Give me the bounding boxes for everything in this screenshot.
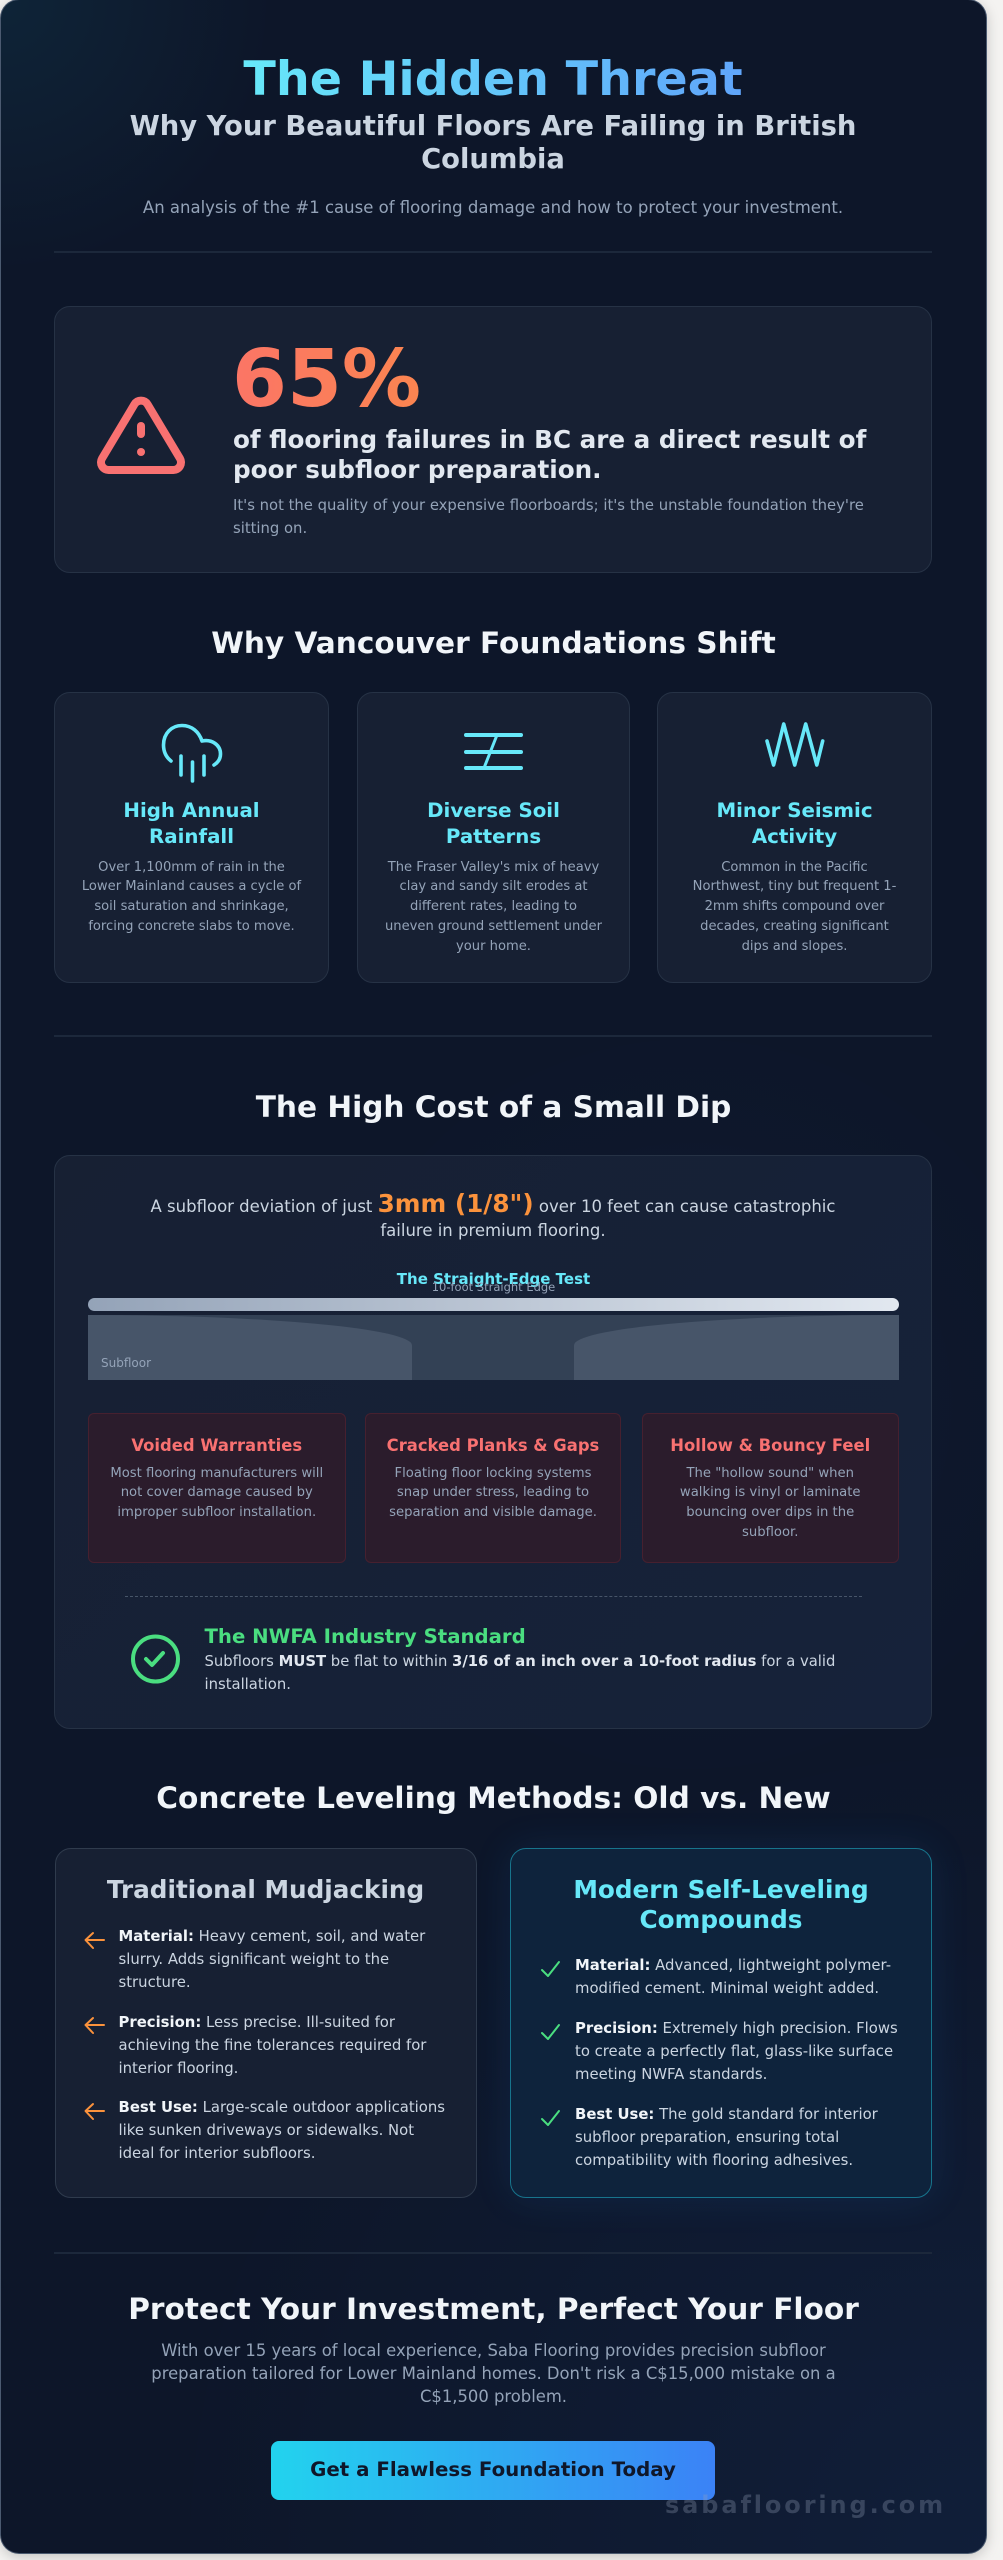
call to action heading: Protect Your Investment, Perfect Your Floor	[128, 2292, 859, 2326]
straight edge bar	[88, 1298, 899, 1311]
card description: Common in the Pacific	[721, 860, 868, 874]
intro text: A subfloor deviation of just 3mm (1/8") over 10 feet can cause catastrophic	[151, 1189, 835, 1218]
card description	[693, 860, 896, 954]
card title	[427, 798, 560, 848]
card description: forcing concrete slabs to move.	[88, 919, 295, 934]
item text: Best Use: Large-scale outdoor applications	[118, 2098, 445, 2116]
item text: structure.	[118, 1973, 191, 1991]
risk text: subfloor.	[742, 1525, 798, 1540]
icon: check	[539, 2102, 563, 2126]
title: The Hidden Threat	[243, 52, 743, 106]
heading: high cost: The High Cost of a Small Dip	[256, 1090, 731, 1124]
call to action text: C$1,500 problem.	[420, 2387, 567, 2406]
icon: arrow	[84, 2103, 105, 2120]
card title: Patterns	[446, 825, 541, 848]
card description	[82, 860, 302, 934]
panel: soil	[357, 692, 630, 983]
card title	[716, 798, 873, 848]
standard text	[204, 1652, 835, 1692]
statistic headline: poor subfloor preparation.	[233, 454, 602, 484]
statistic number: 65%	[232, 332, 421, 424]
call to action button: Get a Flawless Foundation Today	[310, 2458, 676, 2481]
risk: voided warranties	[88, 1412, 346, 1562]
risk text: walking is vinyl or laminate	[680, 1485, 861, 1500]
card title: Activity	[752, 825, 837, 848]
heading: leveling methods: Concrete Leveling Methods: Old vs. New	[156, 1781, 831, 1815]
card description: decades, creating significant	[700, 919, 889, 934]
card title: High Annual	[123, 798, 260, 822]
icon: arrow	[84, 2017, 105, 2034]
panel: modern self-leveling	[510, 1848, 932, 2198]
item text	[575, 2102, 878, 2172]
item text	[575, 1956, 891, 1997]
item text: subfloor preparation, ensuring total	[575, 2128, 839, 2146]
risk text: improper subfloor installation.	[117, 1505, 316, 1520]
item text: Material: Advanced, lightweight polymer-	[575, 1956, 891, 1974]
subtitle	[130, 110, 856, 174]
card description: different rates, leading to	[410, 899, 577, 914]
risk title: Voided Warranties	[131, 1436, 302, 1454]
intro text	[150, 1189, 835, 1240]
statistic description: sitting on.	[233, 520, 307, 537]
diagram: straight-edge test	[88, 1270, 899, 1380]
panel title: Compounds	[640, 1904, 802, 1934]
panel: seismic	[657, 692, 932, 983]
standard title: The NWFA Industry Standard	[204, 1625, 526, 1648]
item text	[118, 1927, 426, 1991]
statistic description	[233, 496, 864, 537]
panel: traditional mudjacking	[54, 1848, 476, 2198]
risk text: Most flooring manufacturers will	[110, 1466, 323, 1480]
item text: achieving the fine tolerances required for	[118, 2036, 426, 2054]
diagram title: The Straight-Edge Test	[397, 1270, 590, 1288]
risk text: separation and visible damage.	[389, 1505, 597, 1520]
risk text	[389, 1466, 597, 1520]
panel title: Modern Self-Leveling	[573, 1874, 869, 1904]
item: precision	[84, 2012, 426, 2077]
panel: 65% statistic	[54, 306, 932, 573]
risk text	[110, 1466, 323, 1520]
card title: Minor Seismic	[716, 798, 873, 822]
item text: compatibility with flooring adhesives.	[575, 2151, 853, 2169]
item text: meeting NWFA standards.	[575, 2065, 767, 2083]
card description: uneven ground settlement under	[385, 919, 602, 934]
item: precision	[541, 2018, 898, 2083]
item text: Material: Heavy cement, soil, and water	[118, 1927, 425, 1945]
risk: cracked planks	[365, 1412, 621, 1562]
standard text: installation.	[204, 1676, 291, 1692]
subtitle: Columbia	[421, 144, 565, 174]
tagline: An analysis of the #1 cause of flooring damage and how to protect your investment.	[143, 198, 843, 217]
call to action text	[1, 2339, 986, 2409]
panel: rainfall	[54, 692, 329, 983]
call to action button	[271, 2441, 715, 2500]
item: best use	[539, 2102, 919, 2172]
item text: Precision: Extremely high precision. Flows	[575, 2018, 898, 2036]
panel title: Traditional Mudjacking	[107, 1874, 424, 1904]
card title: Rainfall	[149, 825, 234, 848]
panel title	[573, 1874, 869, 1934]
heading: why foundations shift: Why Vancouver Foundations Shift	[211, 626, 776, 660]
subfloor label: Subfloor	[101, 1356, 151, 1370]
risk text: The "hollow sound" when	[686, 1466, 854, 1480]
statistic headline	[233, 424, 867, 484]
item text: ideal for interior subfloors.	[118, 2144, 316, 2162]
icon: rain cloud	[162, 724, 222, 783]
item text: interior flooring.	[118, 2059, 238, 2077]
item text: Precision: Less precise. Ill-suited for	[118, 2012, 395, 2030]
risk text: not cover damage caused by	[121, 1485, 313, 1500]
statistic description: It's not the quality of your expensive floorboards; it's the unstable foundation they're	[233, 496, 864, 514]
left subfloor hump	[88, 1314, 412, 1380]
risk text: Floating floor locking systems	[395, 1466, 591, 1480]
intro text: failure in premium flooring.	[380, 1220, 606, 1240]
item: material	[541, 1956, 891, 1997]
risk title: Cracked Planks & Gaps	[387, 1436, 599, 1454]
risk text: snap under stress, leading to	[397, 1485, 589, 1500]
watermark: sabaflooring.com	[665, 2491, 946, 2519]
statistic headline: of flooring failures in BC are a direct result of	[233, 424, 866, 454]
item text	[118, 2012, 426, 2077]
right subfloor hump	[574, 1314, 899, 1380]
card title: Diverse Soil	[427, 798, 560, 822]
panel: cost of a dip	[54, 1155, 932, 1729]
card description: Lower Mainland causes a cycle of	[82, 879, 301, 894]
card description: dips and slopes.	[742, 939, 847, 954]
icon: soil layers	[464, 733, 523, 770]
risk text: bouncing over dips in the	[686, 1505, 854, 1520]
card description: Over 1,100mm of rain in the	[98, 860, 285, 874]
icon: check	[541, 1961, 560, 1977]
icon: warning triangle	[97, 396, 185, 474]
card description: soil saturation and shrinkage,	[94, 899, 289, 914]
card description: Northwest, tiny but frequent 1-	[693, 879, 896, 894]
risk title: Hollow & Bouncy Feel	[670, 1436, 870, 1454]
risk text	[680, 1466, 861, 1540]
subfloor	[88, 1314, 899, 1380]
item text: Best Use: The gold standard for interior	[575, 2104, 878, 2122]
NWFA standard	[131, 1625, 835, 1692]
risk: hollow feel	[642, 1412, 899, 1562]
item: best use	[84, 2098, 445, 2162]
item: material	[84, 1927, 426, 1991]
call to action text: With over 15 years of local experience, Saba Flooring provides precision subfloor	[161, 2341, 826, 2360]
card description: 2mm shifts compound over	[705, 899, 884, 914]
card description: The Fraser Valley's mix of heavy	[388, 860, 599, 874]
card description: clay and sandy silt erodes at	[400, 879, 588, 894]
subtitle: Why Your Beautiful Floors Are Failing in British	[130, 110, 856, 142]
item text	[575, 2018, 898, 2083]
call to action text: preparation tailored for Lower Mainland homes. Don't risk a C$15,000 mistake on a	[151, 2364, 836, 2383]
item text: slurry. Adds significant weight to the	[118, 1950, 389, 1968]
card description: your home.	[456, 939, 531, 954]
icon: seismic wave	[765, 722, 824, 767]
icon: check circle	[131, 1634, 180, 1684]
item text: modified cement. Minimal weight added.	[575, 1979, 879, 1997]
item text	[118, 2098, 445, 2162]
icon: check	[541, 2024, 560, 2040]
item text: to create a perfectly flat, glass-like surface	[575, 2042, 893, 2060]
straight edge label: 10-foot Straight Edge	[432, 1280, 555, 1294]
standard text: Subfloors MUST be flat to within 3/16 of an inch over a 10-foot radius for a valid	[204, 1652, 835, 1670]
card title	[123, 798, 260, 848]
item text: like sunken driveways or sidewalks. Not	[118, 2121, 414, 2139]
header	[130, 52, 856, 217]
icon: arrow	[84, 1932, 105, 1949]
card description	[385, 860, 602, 954]
